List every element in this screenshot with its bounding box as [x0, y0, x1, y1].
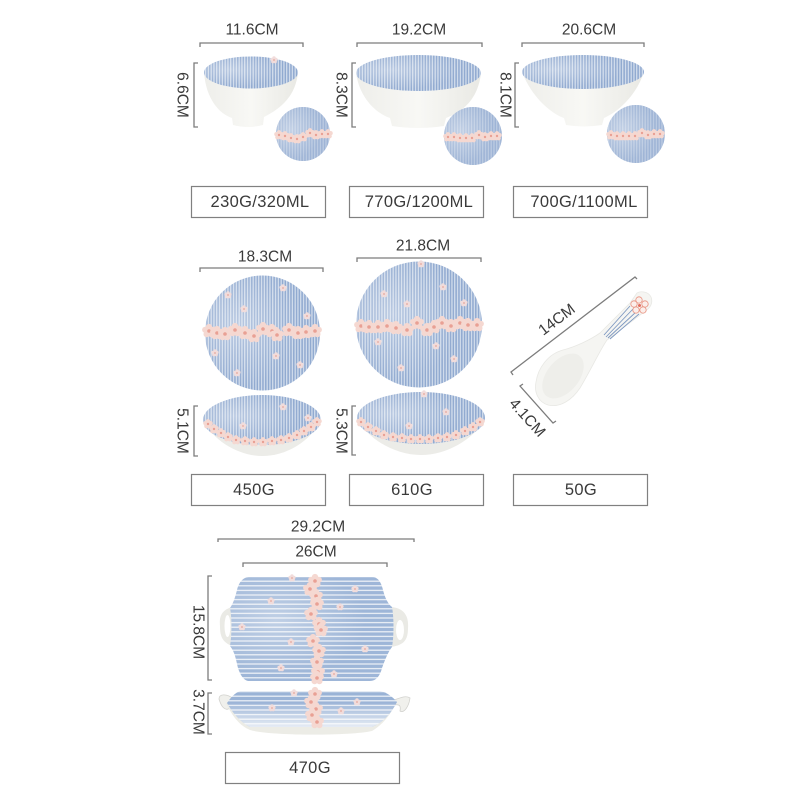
depth dimension 15.8CM — [190, 576, 212, 680]
plate side view — [203, 395, 322, 456]
weight label: 700G/1100ML — [530, 193, 638, 211]
panel: small bowl — [174, 22, 333, 218]
small bowl side view — [204, 56, 298, 127]
weight label: 470G — [289, 759, 331, 777]
weight label: 450G — [233, 481, 275, 499]
panel: large plate — [332, 238, 485, 506]
plate top view — [354, 260, 484, 388]
panel: tray — [190, 518, 414, 784]
height dimension 5.1CM: 5.1CM — [174, 408, 190, 454]
overall width dimension 29.2CM — [218, 518, 414, 542]
depth dimension 3.7CM: 3.7CM — [190, 689, 206, 735]
width dimension 11.6CM: 11.6CM — [225, 22, 279, 38]
weight label — [192, 474, 326, 506]
panel: spoon — [505, 277, 652, 506]
width dimension 20.6CM — [522, 22, 644, 47]
height dimension 6.6CM — [174, 63, 198, 127]
width dimension 20.6CM: 20.6CM — [562, 22, 616, 38]
length dimension 14CM — [511, 277, 637, 375]
width dimension 21.8CM — [357, 238, 481, 262]
spoon — [534, 292, 652, 406]
plate side view — [356, 390, 485, 455]
weight label — [514, 474, 648, 506]
wide bowl side view — [522, 55, 644, 126]
depth dimension 4.1CM: 4.1CM — [505, 395, 549, 441]
width dimension 18.3CM: 18.3CM — [238, 248, 292, 266]
spoon flower — [631, 297, 648, 313]
weight label: 610G — [391, 481, 433, 499]
weight label: 230G/320ML — [211, 193, 309, 211]
weight label — [514, 186, 648, 218]
height dimension 5.3CM — [332, 406, 356, 455]
height dimension 8.3CM: 8.3CM — [332, 72, 350, 118]
weight label — [350, 186, 484, 218]
weight label — [350, 474, 484, 506]
plate top view — [202, 276, 322, 390]
panel: medium bowl — [332, 22, 502, 218]
width dimension 21.8CM: 21.8CM — [396, 238, 450, 254]
weight label — [226, 752, 400, 784]
overall width dimension 29.2CM: 29.2CM — [291, 518, 345, 536]
depth dimension 4.1CM — [505, 384, 556, 441]
height dimension 5.3CM: 5.3CM — [332, 408, 350, 454]
height dimension 5.1CM — [174, 406, 198, 456]
panel: wide bowl — [496, 22, 665, 218]
height dimension 6.6CM: 6.6CM — [174, 72, 190, 118]
handle width dimension 26CM — [243, 544, 387, 567]
small bowl top view — [274, 107, 333, 161]
tray side view — [219, 687, 410, 735]
weight label — [192, 186, 326, 218]
medium bowl side view — [356, 55, 481, 128]
tray top view — [220, 574, 408, 684]
weight label: 50G — [565, 481, 597, 499]
width dimension 11.6CM — [200, 22, 303, 47]
width dimension 18.3CM — [200, 248, 323, 272]
weight label: 770G/1200ML — [365, 193, 473, 211]
height dimension 8.1CM — [496, 63, 519, 127]
depth dimension 15.8CM: 15.8CM — [190, 605, 206, 659]
height dimension 8.3CM — [332, 63, 356, 127]
width dimension 19.2CM — [357, 22, 482, 47]
handle width dimension 26CM: 26CM — [295, 544, 337, 560]
panel: medium plate — [174, 248, 326, 506]
length dimension 14CM: 14CM — [535, 301, 579, 339]
medium bowl top view — [443, 107, 502, 165]
wide bowl top view — [606, 105, 665, 163]
width dimension 19.2CM: 19.2CM — [392, 22, 446, 38]
height dimension 8.1CM: 8.1CM — [496, 72, 514, 118]
